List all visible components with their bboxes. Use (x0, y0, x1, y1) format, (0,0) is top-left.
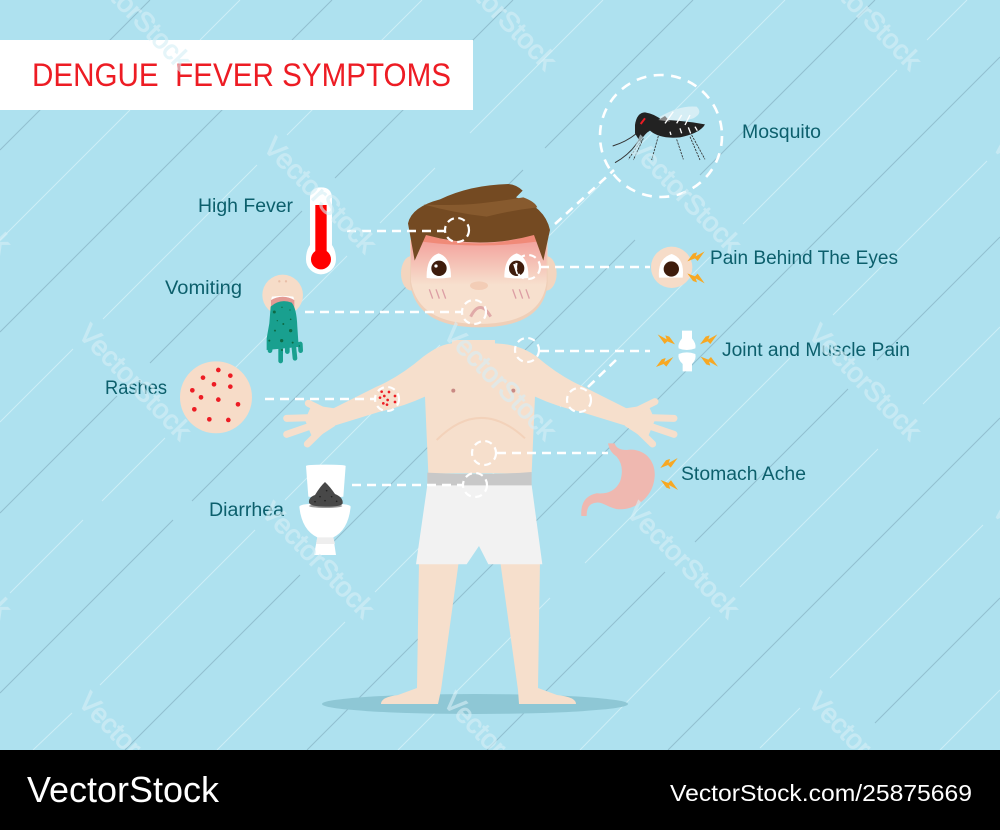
watermarks: VectorStock (258, 131, 382, 259)
connector: eyes (540, 266, 650, 268)
fever band (422, 233, 537, 245)
icon: mosquito (600, 75, 722, 197)
belly line (437, 418, 525, 440)
connector: mosquito (555, 170, 614, 224)
watermarks: VectorStock (256, 496, 380, 624)
face (410, 237, 548, 327)
connector: elbow (588, 360, 616, 387)
body and arms (287, 340, 674, 564)
watermarks: VectorStock (623, 131, 747, 259)
rash on arm (379, 390, 396, 406)
figure: boy (287, 184, 674, 704)
connector: stomach (497, 452, 608, 454)
nipples (451, 389, 455, 393)
icon: joint pain (656, 331, 718, 371)
icon: eye pain (651, 247, 705, 288)
blush (429, 289, 529, 299)
hotspot circles (375, 218, 591, 497)
footer url: VectorStock.com/25875669 (670, 780, 972, 806)
watermarks: Vectors (73, 686, 157, 772)
label: diarrhea: Diarrhea (209, 500, 284, 521)
icon: vomiting (262, 275, 303, 361)
watermarks: Vectors (803, 686, 887, 772)
label: stomach ache: Stomach Ache (681, 464, 806, 485)
watermarks: Vectors (438, 686, 522, 772)
wing (660, 106, 699, 121)
head (401, 184, 557, 327)
icon: stomach (581, 443, 678, 516)
icon: thermometer (306, 187, 336, 274)
connector: diarrhea (352, 484, 463, 486)
footer bar (0, 750, 1000, 830)
ears (401, 256, 422, 291)
legs (628, 135, 705, 160)
label: mosquito: Mosquito (742, 122, 821, 143)
proboscis (613, 133, 640, 163)
connector: rashes (265, 398, 375, 400)
label: joint and muscle pain: Joint and Muscle Pain (722, 340, 910, 361)
icon: toilet (299, 465, 351, 555)
body (635, 112, 705, 142)
legs (381, 560, 576, 704)
watermarks: VectorStock (803, 318, 927, 446)
icon: rashes (180, 361, 252, 433)
label: pain behind the eyes: Pain Behind The Eyes (710, 248, 898, 269)
fever flush (411, 235, 547, 285)
left hand (287, 403, 335, 444)
label: high fever: High Fever (198, 196, 294, 217)
connector: joint (540, 350, 650, 352)
mouth (471, 307, 491, 317)
nose (470, 281, 488, 290)
label: rashes: Rashes (105, 378, 167, 399)
eyes (427, 253, 451, 279)
connector: vomiting (305, 311, 462, 313)
watermarks: VectorStock (621, 496, 745, 624)
hair (408, 184, 550, 261)
right hand (625, 402, 674, 444)
title: DENGUE FEVER SYMPTOMS (32, 57, 451, 93)
shadow under figure (322, 694, 628, 714)
watermarks: VectorStock (73, 318, 197, 446)
shorts (416, 485, 542, 564)
footer brand: VectorStock (27, 769, 220, 810)
connector: high fever (347, 230, 445, 232)
waistband (427, 472, 532, 485)
label: vomiting: Vomiting (165, 278, 242, 299)
watermarks: VectorStock (438, 318, 562, 446)
title banner (0, 40, 473, 110)
